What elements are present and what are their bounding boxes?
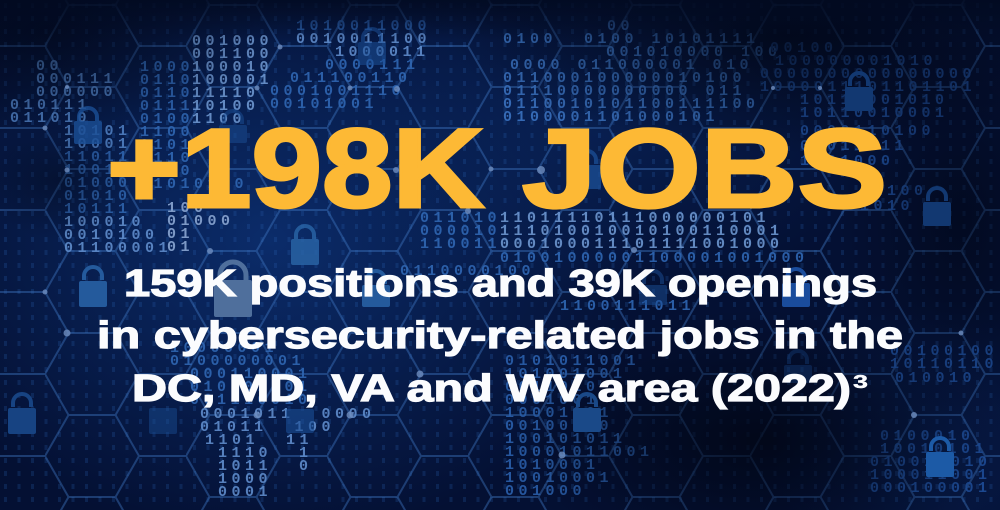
binary digit columns: 0 1 0 0 1 0 (895, 370, 972, 387)
binary digit columns: 1 0 1 1 1 0 0 1 0 1 0 (800, 92, 944, 109)
binary digit columns: 0 1 0 0 (140, 111, 190, 128)
binary digit columns: 0 0 1 0 0 1 0 0 (890, 343, 994, 360)
binary digit columns: 0 1 1 0 0 (860, 183, 923, 200)
binary digit columns: 1 0 0 0 1 0 (64, 214, 141, 231)
binary digit columns: 1 1 0 1 1 (64, 149, 127, 166)
binary digit columns: 1 1 0 0 1 1 1 0 1 1 (560, 298, 691, 315)
icon: large padlock (214, 262, 252, 317)
binary digit columns: 1 0 1 1 0 1 1 0 (890, 356, 994, 373)
binary digit columns: 1 0 0 0 0 1 1 (335, 44, 425, 61)
binary digit columns: 0 1 0 1 0 1 1 0 0 1 (505, 353, 636, 370)
binary digit columns: 1 0 0 0 0 1 (192, 72, 269, 89)
binary digit columns: 1 0 0 1 0 (64, 162, 127, 179)
subheading: DC, MD, VA and WV area (2022) (132, 368, 851, 410)
icon: padlock (79, 267, 107, 307)
network nodes (42, 44, 964, 458)
binary digit columns: 0 1 0 1 (140, 137, 190, 154)
binary digit columns: 1 1 1 1 0 (192, 85, 255, 102)
binary digit columns: 0 1 0 0 0 0 0 0 0 1 (170, 353, 301, 370)
binary digit columns: 0 1 0 0 0 1 0 (880, 428, 970, 445)
headline: JOBS (522, 106, 887, 231)
binary digit columns: 0 0 0 1 1 0 0 0 1 (190, 366, 307, 383)
binary digit columns: 1 0 0 0 0 1 1 1 0 1 1 0 1 1 0 1 (760, 79, 972, 96)
binary digit columns: 0 1 1 0 0 1 0 1 0 1 1 0 0 1 1 1 1 0 0 (503, 96, 755, 113)
headline: +198K (107, 106, 484, 231)
binary digit columns: 1 0 0 1 0 0 0 1 (505, 470, 609, 487)
binary digit columns: 0 0 1 1 0 0 (192, 46, 269, 63)
binary digit columns: 0 0 0 0 0 1 1 0 0 0 0 0 1 0 1 0 (510, 57, 749, 74)
binary digit columns: 0 0 0 0 1 1 0 1 0 0 (800, 123, 931, 140)
binary digit columns: 0 0 (607, 18, 630, 35)
icon: padlock (362, 271, 390, 307)
binary digit columns: 1 1 1 0 1 (218, 445, 308, 462)
subheading: 159K positions and 39K openings (124, 263, 877, 305)
binary digit columns: 1 0 0 0 1 0 1 1 0 0 1 (505, 444, 649, 461)
binary digit columns: 0 1 1 0 0 0 1 0 0 0 0 0 0 1 0 1 0 0 (503, 70, 742, 87)
binary digit columns: 0 0 0 1 1 1 (36, 71, 113, 88)
binary digit columns: 1 0 0 1 0 1 0 1 (880, 441, 984, 458)
binary digit columns: 0 1 0 1 0 1 0 0 1 (190, 379, 307, 396)
binary digit columns: 1 0 1 0 0 1 1 0 0 0 (296, 18, 427, 35)
icon: padlock (782, 269, 810, 307)
binary digit columns: 0 1 0 0 0 1 0 0 1 0 1 0 1 1 1 1 (503, 31, 755, 48)
binary digit columns: 0 0 1 0 0 1 1 1 0 0 (296, 31, 427, 48)
binary digit columns: 1 1 0 0 (140, 124, 190, 141)
icon: padlock (8, 394, 36, 434)
binary digit columns: 0 1 (167, 226, 190, 243)
binary digit columns: 0 0 1 0 (140, 163, 190, 180)
binary digit columns: 0 1 1 0 1 0 (10, 110, 87, 127)
binary digit columns: 0 0 1 0 1 0 0 1 (270, 96, 374, 113)
binary digit columns: 0 0 1 0 1 0 0 (64, 227, 154, 244)
binary digit columns: 1 0 0 0 1 0 0 1 (505, 405, 609, 422)
binary digit columns: 0 1 1 1 0 0 1 1 0 (290, 70, 407, 87)
binary digit columns: 1 0 1 0 0 (192, 98, 255, 115)
binary digit columns: 0 1 1 1 0 0 0 0 0 0 0 0 0 0 0 1 1 (503, 83, 742, 100)
binary digit columns: 0 1 1 0 (140, 150, 190, 167)
icon: padlock (845, 73, 873, 111)
binary digit columns: 0 0 0 0 1 0 (420, 223, 497, 240)
binary digit columns: 0 0 0 0 0 0 (36, 84, 113, 101)
binary digit columns: 1 1 1 0 1 0 0 1 0 0 1 0 1 0 0 1 1 0 0 0 1 (500, 223, 779, 240)
binary digit columns: 0 0 0 0 1 1 1 (325, 57, 415, 74)
binary digit columns: 0 1 0 1 1 0 1 1 (800, 138, 904, 155)
binary digit columns: 1 0 1 0 0 0 1 (505, 457, 595, 474)
binary digit columns: 1 1 0 1 1 1 (205, 432, 309, 449)
binary digit columns: 0 0 0 1 0 1 1 0 0 0 0 (200, 406, 371, 423)
binary digit columns: 1 0 0 0 1 1 0 0 1 (870, 467, 987, 484)
binary digit columns: 0 0 0 0 0 0 0 0 0 0 0 0 0 0 0 0 (760, 66, 972, 83)
icon: padlock (291, 226, 319, 265)
binary digit columns: 0 1 0 1 1 1 (10, 97, 87, 114)
binary digit columns: 0 0 0 0 1 0 0 1 0 0 0 (660, 250, 804, 267)
binary digit columns: 0 0 1 0 0 0 (505, 483, 582, 500)
binary digit columns: 1 0 1 0 1 (64, 123, 127, 140)
binary digit columns: 0 0 1 0 0 (770, 40, 833, 57)
binary digit columns: 1 0 1 1 0 0 1 0 0 0 1 (800, 105, 944, 122)
binary digit columns: 1 0 0 0 (140, 59, 190, 76)
binary digit columns: 1 0 0 (167, 200, 203, 217)
icon: padlock (573, 151, 601, 189)
binary digit columns: 0 0 1 0 0 1 0 0 (505, 418, 609, 435)
icon: padlock (149, 408, 177, 434)
binary digit columns: 1 0 0 1 0 1 0 1 1 (505, 431, 622, 448)
binary digit columns: 0 1 1 0 0 0 0 1 (64, 240, 168, 257)
icon: padlock (219, 111, 247, 143)
binary digit columns: 0 0 1 1 0 1 0 (505, 379, 595, 396)
binary digit columns: 0 1 0 0 1 0 0 0 0 0 1 1 (500, 250, 658, 267)
binary digit columns: 0 0 0 1 (218, 484, 268, 501)
binary digit columns: 0 0 (36, 58, 59, 75)
binary digit columns: 0 1 0 0 1 0 0 1 0 (870, 454, 987, 471)
binary digit columns: 0 0 0 1 0 0 1 1 1 0 (270, 83, 401, 100)
icon: padlock (923, 188, 951, 226)
icon: padlock (74, 108, 102, 144)
binary digit columns: 1 1 0 0 1 1 (420, 236, 497, 253)
icon: padlock (926, 438, 954, 477)
binary digit columns: 0 1 0 1 1 1 0 0 (200, 419, 331, 436)
binary digit columns: 0 1 0 0 0 (64, 175, 127, 192)
icon: padlock (358, 29, 386, 65)
binary digit columns: 0 1 0 0 0 (167, 213, 230, 230)
binary digit columns: 0 0 1 0 0 0 (192, 33, 269, 50)
binary digit columns: 1 0 1 0 0 1 0 0 1 (505, 366, 622, 383)
binary digit columns: 0 1 1 0 0 0 0 1 0 0 (400, 263, 531, 280)
binary digit columns: 1 0 0 0 0 0 0 1 (170, 340, 274, 357)
binary digit columns: 0 0 1 1 1 0 0 1 0 (190, 392, 307, 409)
icon: padlock (639, 271, 667, 305)
binary digit columns: 0 0 0 1 0 0 1 (505, 392, 595, 409)
binary digit columns: 1 0 0 0 (218, 471, 268, 488)
binary digit columns: 1 0 1 1 1 (64, 201, 127, 218)
binary digit columns: 1 1 0 0 (192, 111, 242, 128)
binary digit columns: 0 1 1 0 (140, 72, 190, 89)
binary digit columns: 0 1 0 1 0 1 1 0 (140, 176, 244, 193)
icon: padlock (573, 394, 601, 432)
binary digit columns: 1 1 0 1 1 1 1 0 1 1 1 0 0 0 0 0 0 1 0 1 (500, 210, 766, 227)
headline (107, 106, 887, 231)
binary digit columns: 1 0 0 0 1 0 (192, 59, 269, 76)
binary digit columns: 0 0 1 0 1 0 0 0 0 1 0 0 (606, 44, 777, 61)
subheading: 3 (853, 372, 868, 392)
icon: padlock (286, 409, 314, 433)
binary digit columns: 0 1 1 1 (140, 98, 190, 115)
binary digit columns: 1 0 1 1 0 (218, 458, 308, 475)
binary digit columns: 0 1 0 1 0 (64, 188, 127, 205)
icon: padlock (784, 351, 812, 383)
binary digit columns: 1 0 0 1 0 0 0 (800, 153, 890, 170)
binary digit columns: 1 0 0 0 0 0 0 0 1 0 1 0 (775, 53, 933, 70)
binary digit columns: 0 1 1 0 1 0 (420, 210, 497, 227)
binary digit columns: 0 0 0 1 0 0 0 0 1 (870, 480, 987, 497)
subheading (97, 263, 903, 410)
binary digit columns: 1 0 0 0 1 (64, 136, 127, 153)
binary digit columns: 0 1 (167, 239, 190, 256)
subheading: in cybersecurity-related jobs in the (97, 315, 903, 357)
binary digit columns: 0 0 0 1 0 0 0 1 1 1 0 1 1 1 1 0 0 1 0 0 0 (500, 236, 779, 253)
binary digit columns: 1 0 1 0 (860, 198, 910, 215)
binary digit columns: 0 1 0 0 0 0 1 1 0 1 0 0 0 1 0 1 (503, 109, 715, 126)
binary digit columns: 0 1 1 0 (140, 85, 190, 102)
